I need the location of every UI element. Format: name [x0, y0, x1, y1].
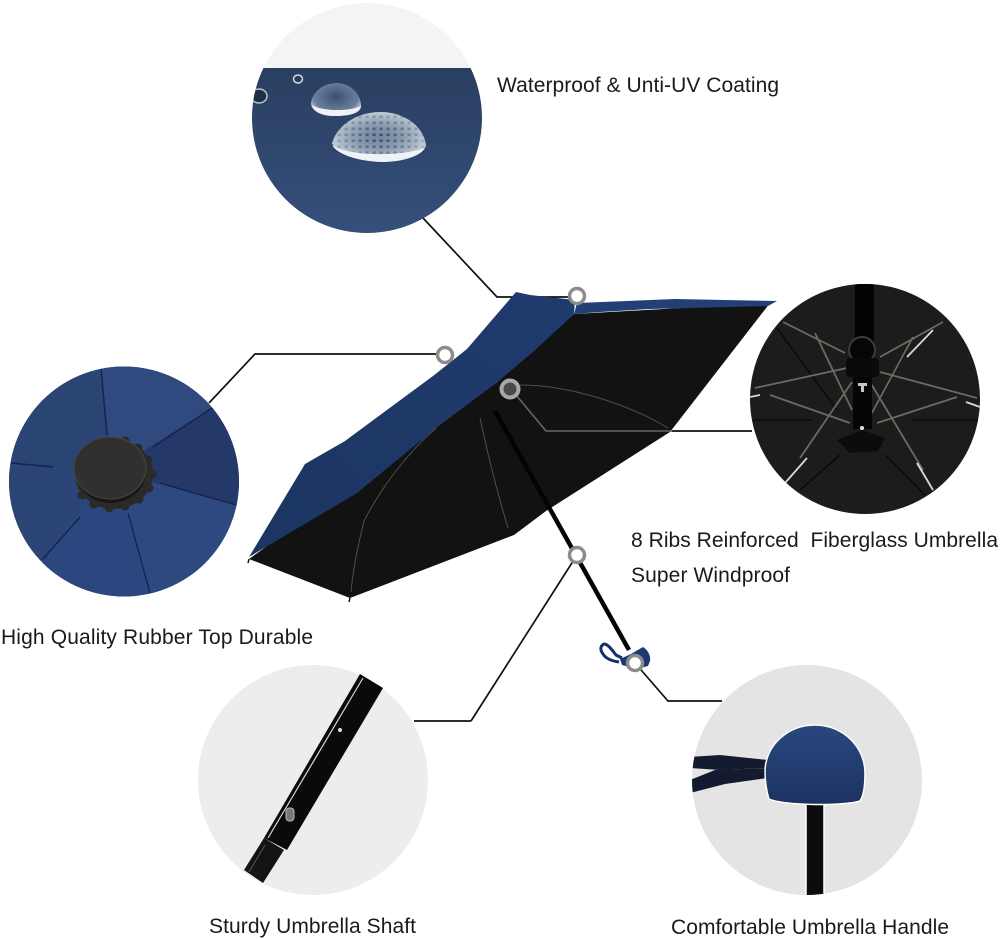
- rib tips: [750, 330, 980, 490]
- seams: [11, 368, 236, 593]
- label: shaft: Sturdy Umbrella Shaft: [209, 915, 416, 938]
- umbrella: [248, 292, 777, 669]
- navy canopy top: [249, 292, 575, 557]
- black canopy underside: [249, 303, 770, 598]
- label: handle: Comfortable Umbrella Handle: [671, 916, 949, 939]
- dark canopy: [748, 282, 982, 516]
- rubber knob: [74, 436, 156, 512]
- canopy tips: [248, 559, 350, 602]
- label: rubber top: High Quality Rubber Top Durable: [1, 626, 313, 649]
- water drops: [251, 75, 426, 162]
- central shaft and hub: [837, 284, 885, 453]
- backdrop disc: [690, 663, 925, 898]
- dome handle: [765, 725, 865, 805]
- label: waterproof coating: Waterproof & Unti-UV Coating: [497, 74, 779, 97]
- panel: rubber top detail: [5, 362, 245, 602]
- navy right sliver: [574, 299, 777, 314]
- panel: handle detail: [690, 663, 925, 898]
- fold lines: [753, 328, 978, 495]
- panel: shaft detail: [198, 665, 428, 895]
- canopy ribs: [351, 385, 668, 592]
- ribs: [755, 322, 977, 470]
- backdrop disc: [198, 665, 428, 895]
- panel: ribs detail: [748, 282, 982, 516]
- leader lines: [209, 218, 752, 721]
- panel: waterproof coating detail: [250, 0, 485, 238]
- shaft: [493, 410, 631, 651]
- cords: [690, 755, 768, 793]
- shaft: [244, 674, 383, 883]
- shaft: [806, 804, 824, 898]
- navy fabric: [250, 68, 485, 238]
- callout markers: [438, 288, 642, 670]
- pale backdrop: [264, 3, 470, 68]
- mini handle: [620, 647, 650, 669]
- connector line inside canopy: [511, 389, 672, 431]
- canopy panels: [5, 362, 245, 602]
- label: ribs: 8 Ribs Reinforced Fiberglass Umbrella: [631, 529, 998, 552]
- label: windproof: Super Windproof: [631, 564, 790, 587]
- strap loop: [601, 644, 622, 662]
